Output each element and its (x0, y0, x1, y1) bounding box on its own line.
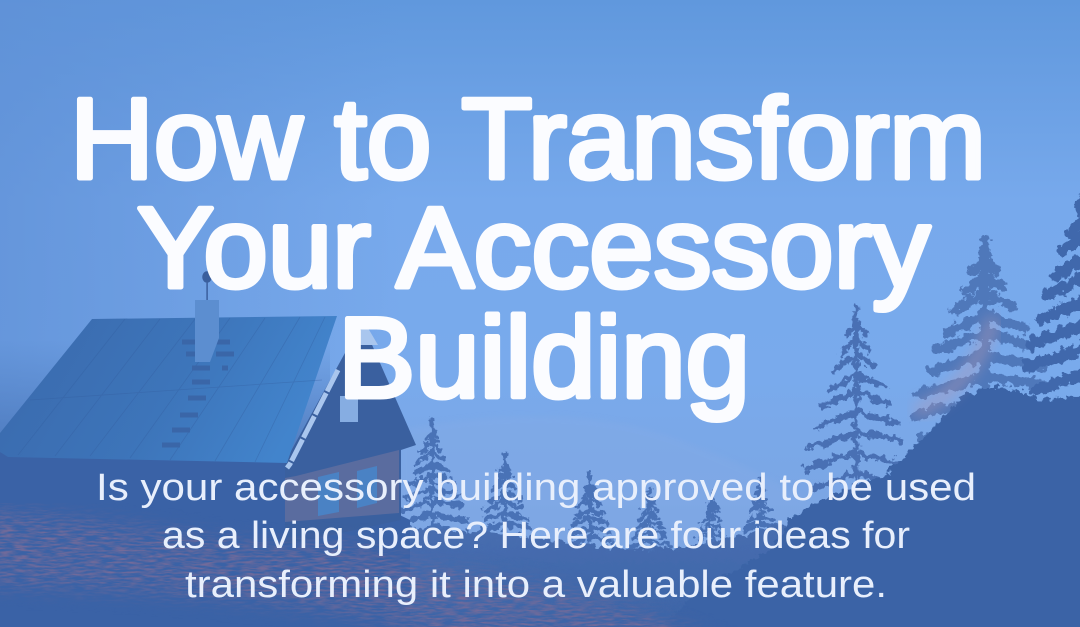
house: chimney (195, 300, 219, 362)
house: gable peak (352, 323, 378, 345)
title (70, 76, 986, 422)
foreground pine trees (805, 175, 1080, 510)
house: roof edge trim (287, 370, 338, 468)
house: ground floor windows (318, 466, 377, 516)
house: lower shadow body (0, 452, 410, 627)
house: roof (0, 316, 337, 463)
mid ground behind the grass (370, 500, 1080, 627)
subtitle: transforming it into a valuable feature. (185, 564, 887, 606)
title: How to Transform (70, 76, 986, 203)
subtitle: as a living space? Here are four ideas for (162, 515, 910, 557)
dark tree covered hillside (640, 385, 1080, 627)
house: roof seams (18, 317, 325, 462)
subtitle (96, 467, 976, 606)
house: gable end (285, 322, 416, 545)
distant trees in centre (398, 420, 782, 587)
house: weather vane (203, 272, 211, 300)
title: Your Accessory (137, 185, 930, 312)
grass (0, 510, 730, 627)
sun flare (915, 318, 993, 412)
background: distant hazy hill (400, 416, 820, 600)
house: attic window (340, 396, 358, 422)
title: Building (338, 295, 750, 422)
subtitle: Is your accessory building approved to be used (96, 467, 976, 509)
house: log wall (285, 450, 399, 522)
house (0, 272, 416, 627)
house: roof snow guards (162, 342, 238, 445)
